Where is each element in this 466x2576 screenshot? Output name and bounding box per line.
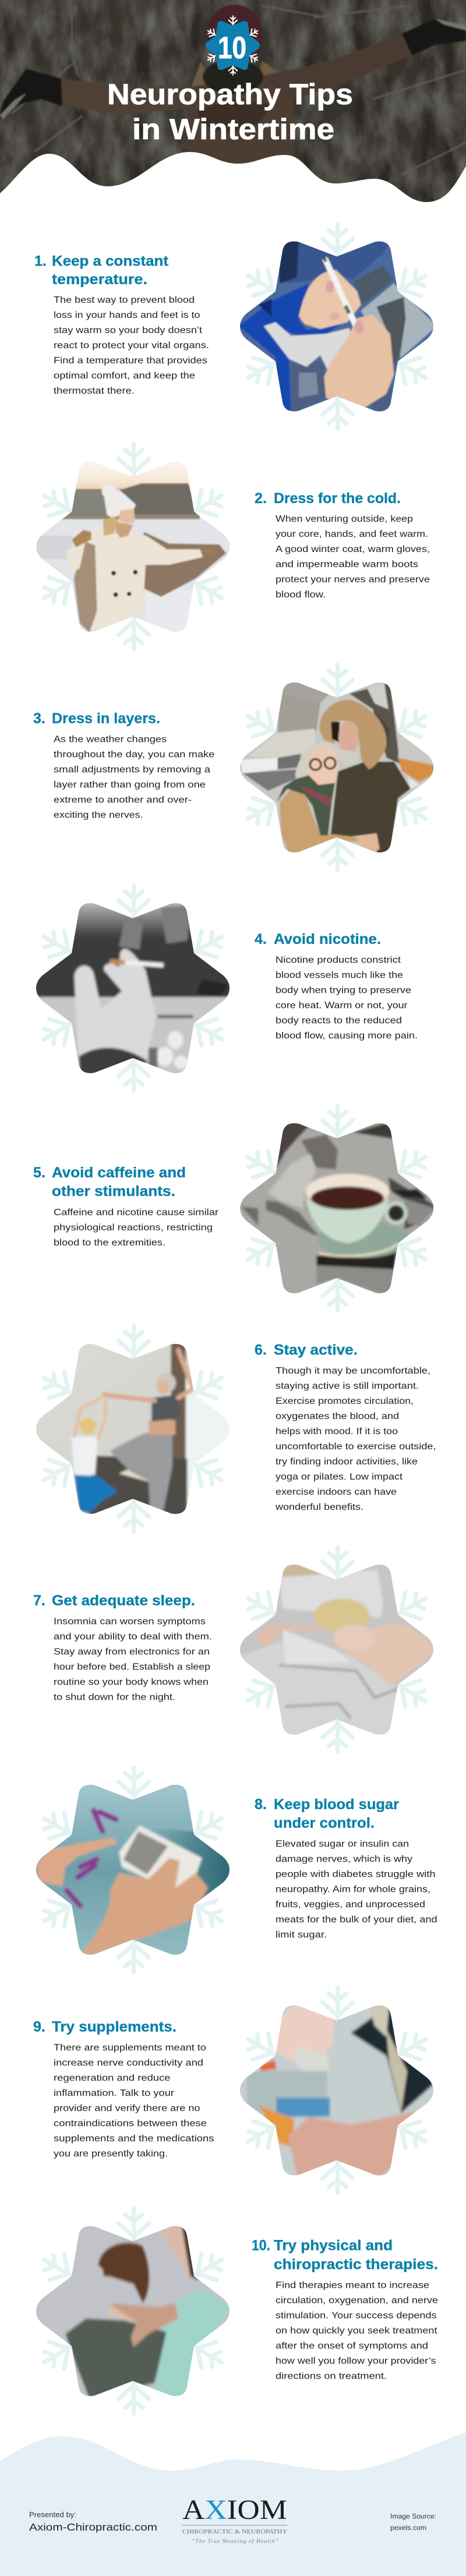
body text: tip 4: blood flow, causing more pain. (276, 1031, 418, 1041)
presented by: Presented by: (29, 2511, 76, 2519)
body text: tip 2: blood flow. (276, 590, 326, 600)
body text: tip 3: exciting the nerves. (54, 811, 143, 820)
heading: tip 6: 6. (255, 1342, 267, 1358)
logo: Axiom Chiropractic: “The True Meaning of Health” (192, 2538, 278, 2545)
body text: tip 10 (276, 2280, 438, 2382)
photo: chiropractor treating patient's back (36, 2226, 230, 2396)
icon: snowflake behind photo 7 (241, 1547, 433, 1752)
body text: tip 10: how well you follow your provider’s (276, 2356, 436, 2366)
body text: tip 10: circulation, oxygenation, and nerve (276, 2295, 438, 2306)
body text: tip 10: directions on treatment. (276, 2371, 387, 2382)
body text: tip 8: people with diabetes struggle with (276, 1869, 436, 1880)
heading: tip 7: 7. (33, 1593, 45, 1609)
image source: Image Source: (390, 2512, 436, 2520)
body text: tip 1: stay warm so your body doesn’t (54, 325, 203, 335)
photo: hands holding thermometer (236, 237, 439, 415)
body text: tip 9: supplements and the medications (54, 2133, 214, 2144)
body text: tip 7: Insomnia can worsen symptoms (54, 1616, 206, 1627)
body text: tip 10: on how quickly you seek treatment (276, 2326, 437, 2336)
body text: tip 3: throughout the day, you can make (54, 750, 214, 759)
heading: tip 2: Dress for the cold. (274, 490, 401, 507)
body text: tip 6: try finding indoor activities, like (276, 1457, 418, 1467)
panel: tip 1 (34, 224, 439, 429)
body text: tip 6: helps with mood. If it is too (276, 1427, 398, 1436)
heading: tip 10: chiropractic therapies. (274, 2256, 438, 2273)
panel: tip 4 (33, 886, 418, 1091)
heading: tip 8: 8. (255, 1796, 267, 1813)
body text: tip 6: exercise indoors can have (276, 1487, 397, 1497)
image source (390, 2512, 436, 2532)
footer wave background (0, 2433, 466, 2576)
heading: tip 8 (255, 1796, 399, 1831)
panel: tip 8 (33, 1767, 437, 1972)
image source: pexels.com (390, 2524, 426, 2532)
header banner (0, 0, 466, 210)
footer (0, 2433, 466, 2576)
body text: tip 9: contraindications between these (54, 2118, 207, 2129)
body text: tip 6 (275, 1366, 436, 1512)
body text: tip 10: Find therapies meant to increase (276, 2280, 429, 2291)
heading: tip 5 (33, 1165, 186, 1199)
heading: tip 1: 1. (34, 253, 47, 269)
heading: tip 9: Try supplements. (52, 2019, 176, 2035)
body text: tip 3: layer rather than going from one (54, 780, 206, 790)
photo: mother and child doing yoga (33, 1341, 235, 1520)
body text: tip 4 (276, 955, 418, 1041)
icon: blue snowflake badge (206, 16, 260, 75)
header photo: woman in snowy forest (0, 0, 466, 210)
panel: tip 7 (33, 1547, 440, 1752)
photo: hands using glucose meter (33, 1781, 235, 1959)
photo: cup of tea on grey blanket (237, 1119, 439, 1297)
panel: tip 3 (33, 665, 439, 870)
body text: tip 9: There are supplements meant to (54, 2043, 206, 2053)
icon: snowflake behind photo 8 (37, 1767, 229, 1972)
body text: tip 8: Elevated sugar or insulin can (276, 1839, 409, 1849)
heading: tip 5: other stimulants. (52, 1183, 175, 1199)
body text: tip 9: regeneration and reduce (54, 2073, 170, 2083)
body text: tip 3: extreme to another and over- (54, 795, 192, 805)
logo: Axiom Chiropractic: CHIROPRACTIC & NEUROPATHY (182, 2528, 287, 2535)
body text: tip 1: Find a temperature that provides (54, 356, 207, 366)
heading: tip 5: 5. (33, 1165, 45, 1181)
photo: woman in cream coat and scarf (33, 458, 235, 636)
body text: tip 9 (54, 2043, 214, 2159)
body text: tip 8: fruits, veggies, and unprocessed (276, 1899, 425, 1910)
body text: tip 4: blood vessels much like the (276, 970, 403, 981)
body text: tip 8: meats for the bulk of your diet, and (276, 1915, 437, 1925)
body text: tip 4: Nicotine products constrict (276, 955, 401, 965)
title: Neuropathy Tips (107, 78, 353, 111)
icon: snowflake behind photo 3 (241, 665, 433, 870)
logo: Axiom Chiropractic (182, 2494, 287, 2545)
body text: tip 6: wonderful benefits. (275, 1502, 363, 1512)
heading: tip 1 (34, 253, 169, 288)
icon: snowflake behind photo 4 (37, 886, 229, 1091)
icon: snowflake behind photo 9 (241, 1988, 433, 2193)
body text: tip 2: and impermeable warm boots (276, 560, 418, 569)
photo: pills passed between hands (240, 2005, 433, 2175)
body text: tip 9: inflammation. Talk to your (54, 2088, 174, 2099)
heading: tip 9: 9. (33, 2019, 45, 2035)
icon: snowflake behind photo 2 (37, 444, 229, 649)
heading: tip 3: Dress in layers. (52, 710, 160, 727)
body text: tip 5: physiological reactions, restricting (54, 1223, 213, 1233)
panel: tip 9 (33, 1988, 440, 2193)
heading: tip 1: Keep a constant (52, 253, 169, 269)
body text: tip 10: stimulation. Your success depends (276, 2310, 437, 2321)
body text: tip 2: When venturing outside, keep (276, 514, 413, 524)
icon: snowflake behind photo 1 (241, 224, 433, 429)
body text: tip 6: oxygenates the blood, and (276, 1411, 399, 1421)
icon: snowflake behind photo 6 (37, 1326, 229, 1531)
body text: tip 6: staying active is still important. (276, 1381, 419, 1391)
heading: tip 10: Try physical and (274, 2238, 393, 2254)
heading: tip 5: Avoid caffeine and (52, 1165, 186, 1181)
icon: snowflake behind photo 5 (241, 1106, 433, 1311)
body text: tip 3 (54, 735, 214, 820)
body text: tip 8: limit sugar. (276, 1930, 327, 1940)
heading: tip 4: 4. (255, 931, 267, 947)
body text: tip 3: small adjustments by removing a (54, 765, 210, 774)
body text: tip 2: your core, hands, and feet warm. (276, 529, 428, 539)
icon: snowflake behind photo 10 (37, 2209, 229, 2414)
presented by (29, 2511, 157, 2533)
body text: tip 5: Caffeine and nicotine cause similar (54, 1208, 218, 1218)
badge number: 10 (218, 31, 246, 65)
body text: tip 7: and your ability to deal with them. (54, 1632, 212, 1642)
panel: tip 6 (33, 1326, 436, 1531)
title: in Wintertime (132, 113, 334, 146)
body text: tip 6: Exercise promotes circulation, (276, 1396, 414, 1406)
body text: tip 7 (54, 1616, 212, 1703)
body text: tip 3: As the weather changes (54, 735, 167, 744)
heading: tip 1: temperature. (52, 271, 147, 288)
photo: older couple in winter coats (237, 678, 439, 857)
heading: tip 8: under control. (274, 1815, 375, 1831)
photo: hand holding cigarette in black and white (33, 899, 235, 1077)
heading: tip 10: 10. (252, 2238, 270, 2254)
heading: tip 6: Stay active. (274, 1342, 358, 1358)
body text: tip 8 (276, 1839, 437, 1940)
body text: tip 1: react to protect your vital organs. (54, 341, 209, 351)
heading: tip 4: Avoid nicotine. (274, 931, 381, 947)
heading: tip 3: 3. (33, 710, 45, 727)
body text: tip 7: routine so your body knows when (54, 1677, 209, 1687)
presented by: Axiom-Chiropractic.com (29, 2521, 157, 2533)
body text: tip 2: protect your nerves and preserve (276, 575, 430, 585)
body text: tip 8: damage nerves, which is why (276, 1854, 412, 1864)
panel: tip 2 (33, 444, 430, 649)
body text: tip 9: provider and verify there are no (54, 2103, 200, 2114)
body text: tip 1: The best way to prevent blood (54, 295, 195, 305)
body text: tip 5 (54, 1208, 218, 1248)
logo: Axiom Chiropractic: AXIOM (182, 2494, 287, 2525)
body text: tip 1: optimal comfort, and keep the (54, 371, 195, 381)
body text: tip 4: body reacts to the reduced (276, 1015, 402, 1026)
body text: tip 4: core heat. Warm or not, your (276, 1000, 408, 1011)
body text: tip 1: thermostat there. (54, 386, 135, 396)
body text: tip 1: loss in your hands and feet is to (54, 310, 200, 320)
body text: tip 1 (54, 295, 209, 396)
photo: woman sleeping under white duvet (240, 1565, 433, 1735)
body text: tip 5: blood to the extremities. (54, 1238, 165, 1248)
woman: hat, scarf, hair and coat (207, 5, 263, 65)
heading: tip 2: 2. (255, 490, 267, 507)
heading: tip 7: Get adequate sleep. (52, 1593, 195, 1609)
body text: tip 2: A good winter coat, warm gloves, (276, 544, 430, 554)
body text: tip 6: yoga or pilates. Low impact (276, 1472, 403, 1482)
body text: tip 4: body when trying to preserve (276, 985, 411, 996)
heading: tip 8: Keep blood sugar (274, 1796, 399, 1813)
body text: tip 9: you are presently taking. (54, 2149, 168, 2159)
body text: tip 7: Stay away from electronics for an (54, 1647, 210, 1657)
body text: tip 7: hour before bed. Establish a sleep (54, 1662, 210, 1672)
body text: tip 8: neuropathy. Aim for whole grains, (276, 1884, 430, 1895)
body text: tip 6: uncomfortable to exercise outside, (276, 1442, 436, 1452)
body text: tip 7: to shut down for the night. (54, 1692, 175, 1703)
panel: tip 5 (33, 1106, 439, 1311)
heading: tip 10 (252, 2238, 438, 2273)
panel: tip 10 (33, 2209, 438, 2414)
body text: tip 6: Though it may be uncomfortable, (276, 1366, 430, 1376)
body text: tip 10: after the onset of symptoms and (276, 2341, 428, 2351)
title (107, 78, 353, 146)
body text: tip 9: increase nerve conductivity and (54, 2058, 203, 2068)
body text: tip 2 (276, 514, 430, 600)
